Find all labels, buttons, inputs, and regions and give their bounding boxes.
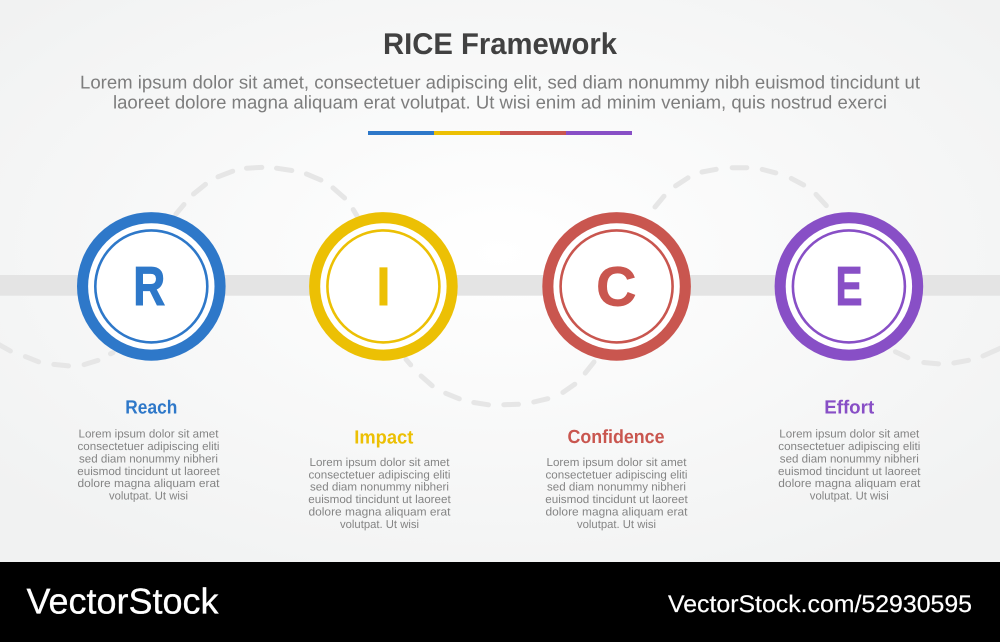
- heading: Confidence: Confidence: [568, 427, 664, 448]
- step E: Effort: [775, 212, 923, 503]
- intro text: [80, 72, 920, 112]
- body text: Reach: consectetuer adipiscing eliti: [78, 441, 220, 453]
- footer logo: VectorStock: [26, 580, 219, 621]
- body text: Effort: dolore magna aliquam erat: [778, 478, 921, 490]
- title: RICE Framework: [383, 28, 617, 61]
- body text: Impact: euismod tincidunt ut laoreet: [308, 494, 452, 506]
- heading: Impact: Impact: [354, 427, 414, 448]
- heading: Effort: Effort: [824, 397, 875, 418]
- intro text: Lorem ipsum dolor sit amet, consectetuer adipiscing elit, sed diam nonummy nibh euismod tincidunt ut: [80, 72, 920, 92]
- body text: Impact: consectetuer adipiscing eliti: [308, 469, 450, 481]
- icon: R circle: [77, 212, 226, 361]
- intro text: laoreet dolore magna aliquam erat volutpat. Ut wisi enim ad minim veniam, quis nostrud exerci: [113, 92, 887, 112]
- icon: C circle: [542, 212, 691, 361]
- horizontal band: [0, 275, 1000, 296]
- body text: Effort: Lorem ipsum dolor sit amet: [779, 429, 920, 441]
- body text: Confidence: euismod tincidunt ut laoreet: [545, 494, 689, 506]
- icon: R circle: R: [133, 255, 165, 317]
- icon: E circle: E: [836, 255, 862, 317]
- body text: Effort: euismod tincidunt ut laoreet: [778, 466, 921, 478]
- body text: Confidence: volutpat. Ut wisi: [577, 519, 656, 531]
- icon: I circle: I: [376, 256, 391, 318]
- body text: Confidence: consectetuer adipiscing eliti: [546, 469, 688, 481]
- body text: Impact: volutpat. Ut wisi: [340, 519, 419, 531]
- heading: Reach: Reach: [125, 397, 177, 418]
- body text: Impact: Lorem ipsum dolor sit amet: [310, 457, 450, 469]
- body text: Impact: dolore magna aliquam erat: [308, 506, 451, 518]
- body text: Reach: [77, 429, 221, 502]
- footer url: VectorStock.com/52930595: [668, 591, 972, 618]
- footer bar: [0, 562, 1000, 642]
- body text: Confidence: dolore magna aliquam erat: [546, 506, 688, 518]
- body text: Confidence: Lorem ipsum dolor sit amet: [546, 457, 687, 469]
- step I: Impact: [308, 212, 458, 531]
- body text: Reach: dolore magna aliquam erat: [78, 478, 220, 490]
- colored divider: [368, 131, 632, 135]
- body text: Effort: volutpat. Ut wisi: [810, 490, 889, 502]
- dashed wave connector: [0, 167, 1000, 405]
- body text: Reach: euismod tincidunt ut laoreet: [77, 466, 221, 478]
- step R: Reach: [77, 212, 226, 503]
- icon: I circle: [309, 212, 458, 361]
- body text: Confidence: sed diam nonummy nibheri: [547, 482, 686, 494]
- body text: Effort: [778, 429, 921, 502]
- icon: E circle: [775, 212, 923, 361]
- icon: C circle: C: [596, 256, 636, 318]
- body text: Impact: sed diam nonummy nibheri: [310, 482, 449, 494]
- body text: Reach: Lorem ipsum dolor sit amet: [78, 429, 219, 441]
- body text: Reach: sed diam nonummy nibheri: [79, 453, 218, 465]
- body text: Reach: volutpat. Ut wisi: [109, 490, 188, 502]
- step C: Confidence: [542, 212, 691, 531]
- body text: Effort: sed diam nonummy nibheri: [780, 453, 919, 465]
- body text: Impact: [308, 457, 452, 531]
- body text: Confidence: [545, 457, 689, 531]
- body text: Effort: consectetuer adipiscing eliti: [778, 441, 920, 453]
